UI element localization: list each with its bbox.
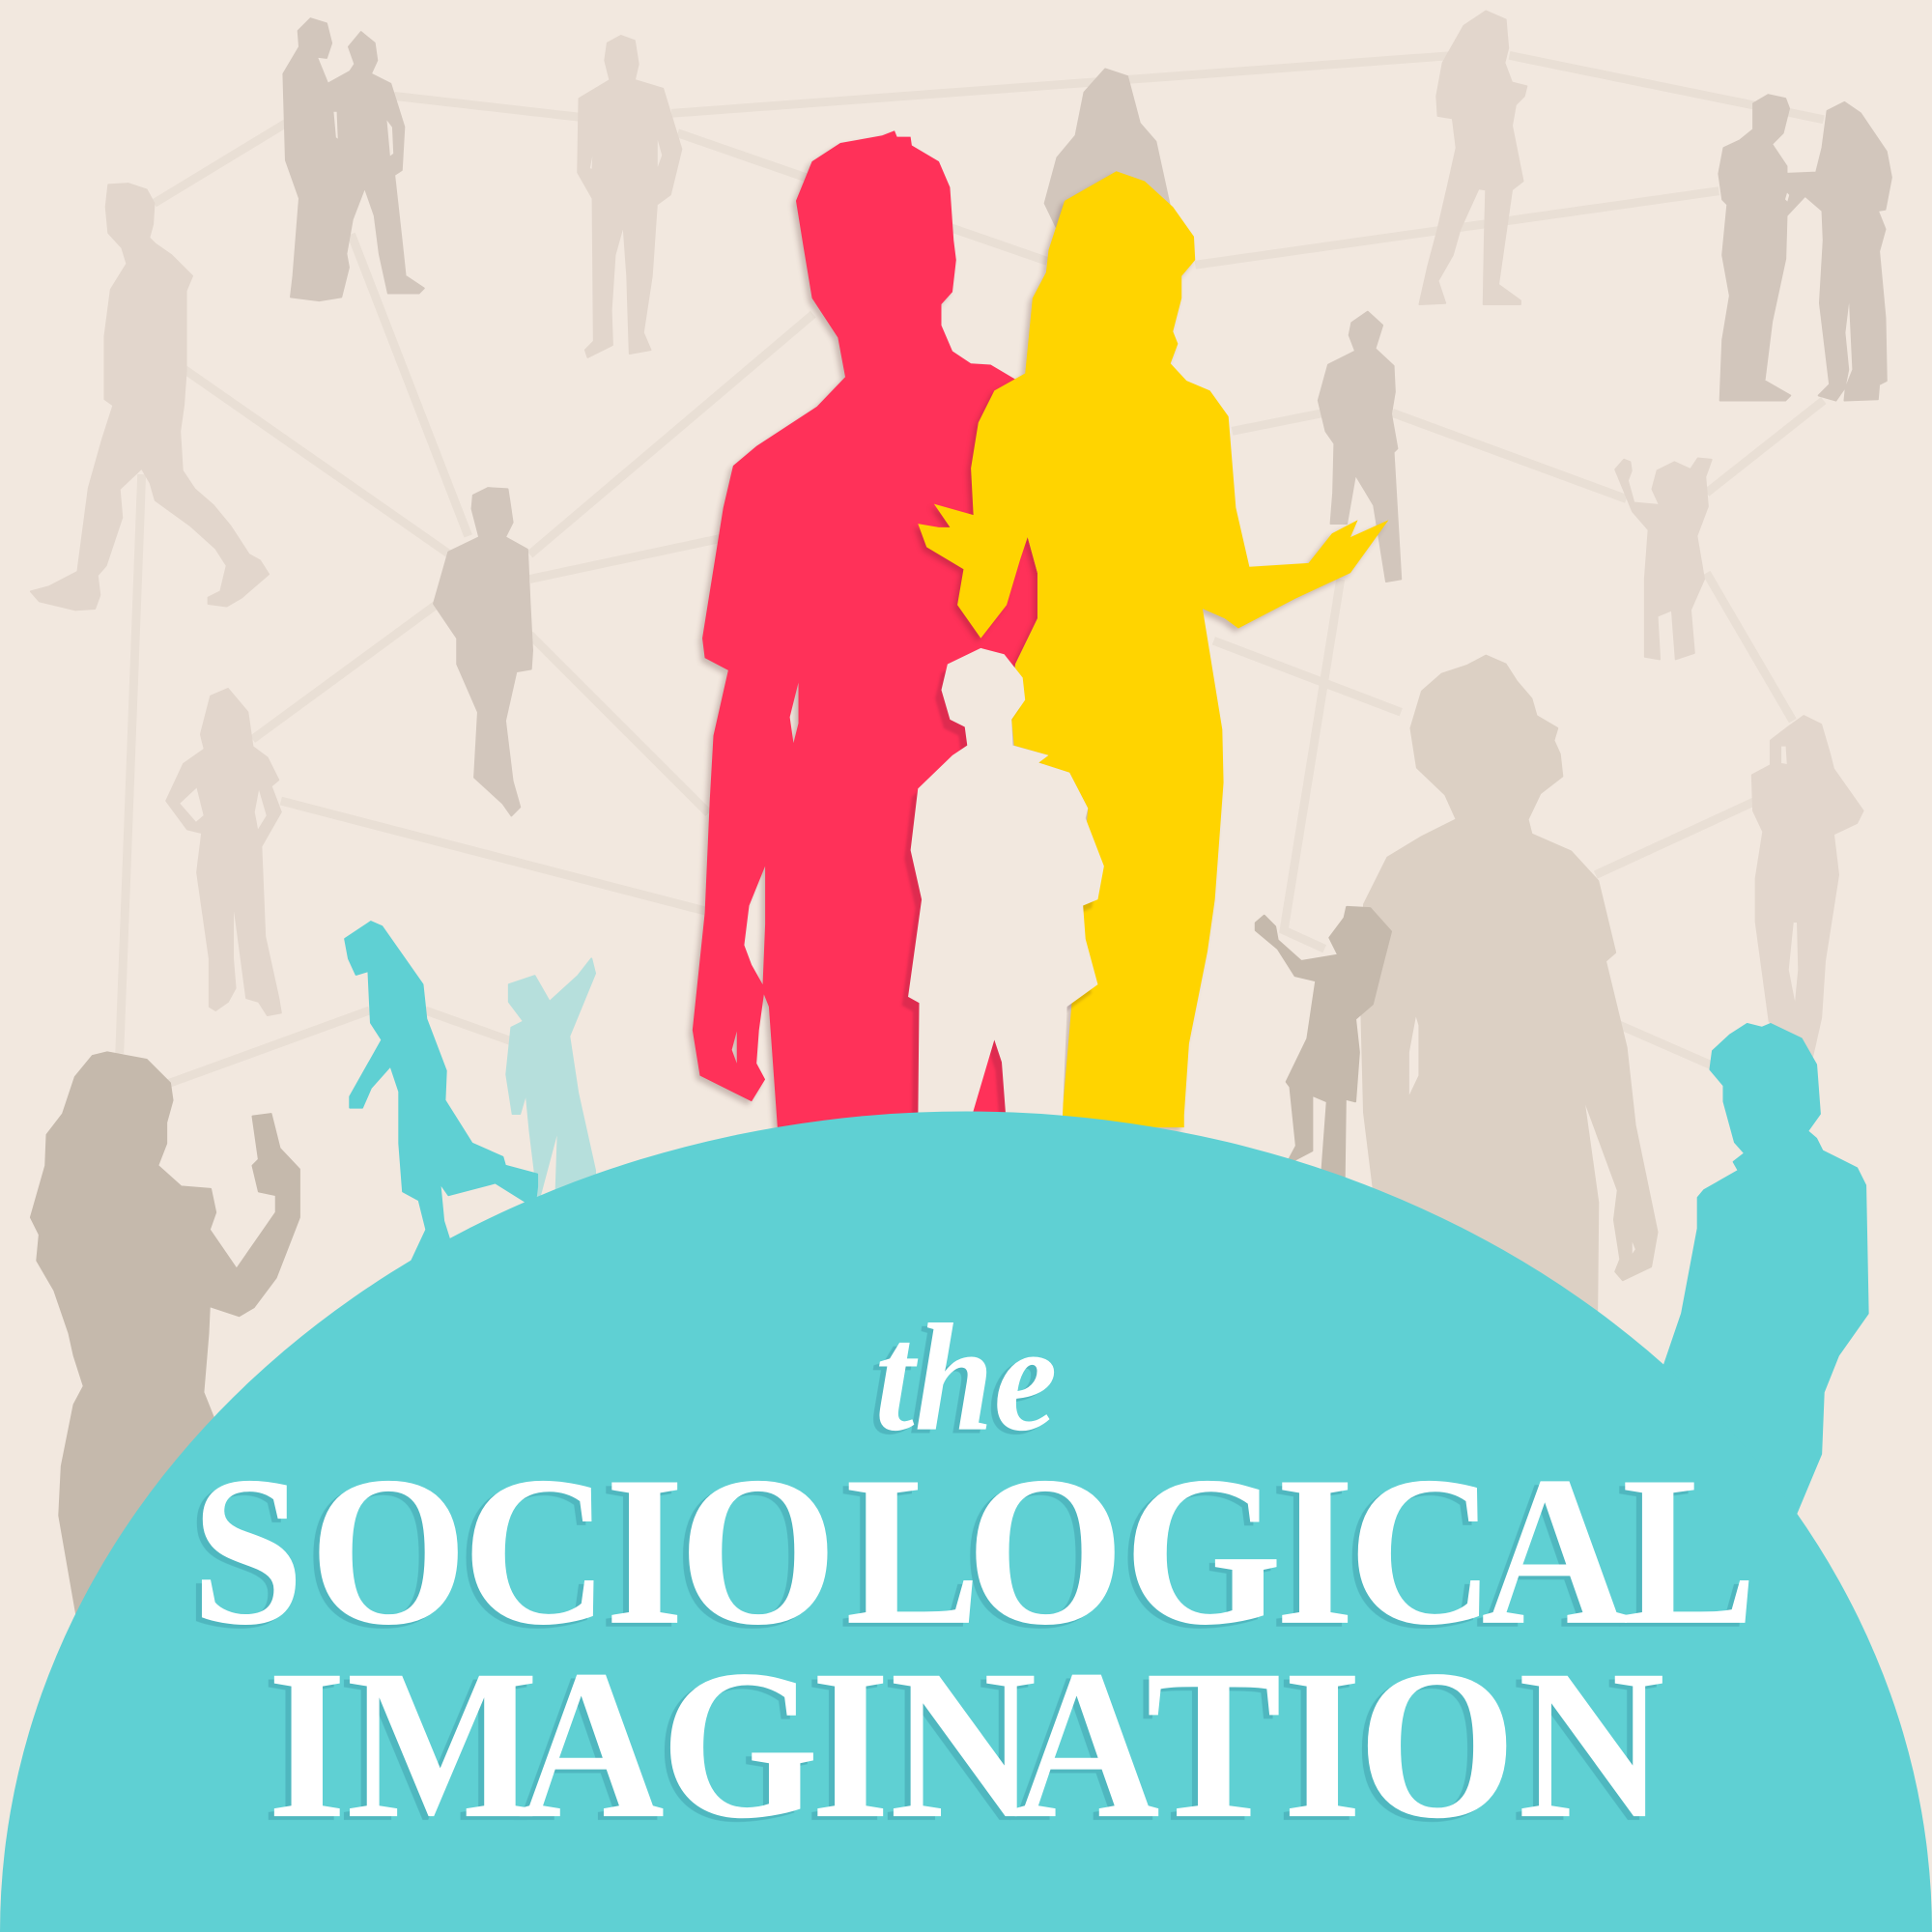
- silhouette: teal woman walking: [345, 922, 537, 1269]
- silhouette: teal man, right: [1663, 1024, 1868, 1521]
- silhouette: man, centre left: [434, 488, 532, 815]
- silhouette: woman behind yellow figure: [1045, 69, 1171, 234]
- silhouette: pair talking, top left: [283, 18, 424, 300]
- silhouette: standing man, top centre: [578, 36, 681, 357]
- silhouette: woman, right: [1752, 716, 1863, 1056]
- silhouette: woman, top right: [1419, 11, 1526, 304]
- silhouette: walking man: [31, 184, 269, 610]
- silhouette: pale teal child: [506, 958, 595, 1202]
- title: IMAGINATION: IMAGINATION: [268, 1625, 1665, 1862]
- silhouette: pair, top right: [1719, 95, 1891, 401]
- silhouette: woman, left: [166, 689, 281, 1015]
- main figure: red man: [693, 130, 1060, 1127]
- silhouette: child waving: [1615, 458, 1712, 659]
- network lines connecting people: [120, 55, 1824, 1084]
- silhouette: child reaching: [1256, 907, 1391, 1189]
- silhouette: man, middle right: [1319, 312, 1401, 582]
- main figure: child: [908, 648, 1104, 1127]
- silhouette: woman with phone: [31, 1052, 299, 1614]
- teal dome: [0, 1112, 1932, 1932]
- title: SOCIOLOGICAL: SOCIOLOGICAL: [191, 1432, 1757, 1669]
- silhouette: large man, right: [1361, 656, 1658, 1324]
- title: the: the: [875, 1293, 1057, 1463]
- main figure: yellow woman: [918, 171, 1389, 1127]
